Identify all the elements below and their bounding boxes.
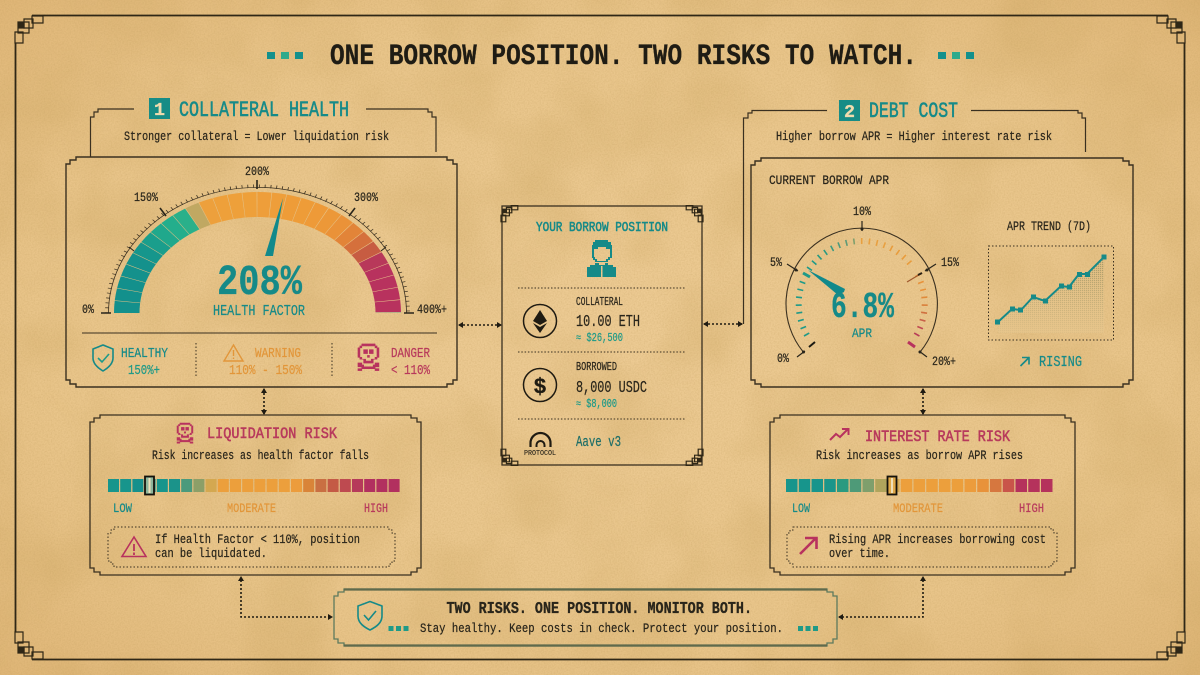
connector arrows xyxy=(238,321,926,620)
liquidation callout: can be liquidated. xyxy=(155,546,267,561)
dial labels: 10% xyxy=(853,205,871,219)
legend: healthy xyxy=(93,345,168,379)
liquidation subtext: Risk increases as health factor falls xyxy=(152,448,369,463)
panel: debt cost gauge and trend xyxy=(751,158,1133,387)
icon: person xyxy=(587,240,616,277)
section heading: debt cost xyxy=(744,99,1086,324)
gauge scale labels: 0% xyxy=(82,303,94,317)
borrowed row: BORROWED xyxy=(576,361,617,374)
borrowed row: $ xyxy=(534,375,546,400)
liquidation heading xyxy=(177,423,337,443)
section heading: debt cost: Higher borrow APR = Higher interest rate risk xyxy=(776,129,1052,144)
dial labels xyxy=(770,205,959,369)
summary headline: TWO RISKS. ONE POSITION. MONITOR BOTH. xyxy=(446,599,752,618)
summary subtext: Stay healthy. Keep costs in check. Protect your position. xyxy=(420,621,783,636)
health factor value xyxy=(213,258,305,320)
apr trend chart xyxy=(988,219,1114,340)
apr dial xyxy=(786,221,937,357)
interest heading: INTEREST RATE RISK xyxy=(865,428,1010,446)
liquidation bar labels: HIGH xyxy=(364,501,388,516)
liquidation bar labels xyxy=(113,501,388,516)
borrowed row: ≈ $8,000 xyxy=(576,398,617,411)
icon: shield check xyxy=(358,602,382,630)
gauge needle xyxy=(265,198,283,256)
section heading: collateral health: 1 xyxy=(154,101,165,121)
interest bar labels: MODERATE xyxy=(893,501,943,516)
apr value xyxy=(831,287,894,341)
gauge scale labels: 400%+ xyxy=(417,303,447,317)
interest bar labels: LOW xyxy=(792,501,810,516)
legend: danger: < 110% xyxy=(391,363,430,379)
collateral row: COLLATERAL xyxy=(576,296,623,309)
legend: healthy: 150%+ xyxy=(128,363,160,379)
protocol row xyxy=(524,433,621,458)
section heading: debt cost: DEBT COST xyxy=(869,99,958,124)
health factor value: HEALTH FACTOR xyxy=(213,303,305,320)
title: ONE BORROW POSITION. TWO RISKS TO WATCH. xyxy=(330,40,917,74)
gauge tick ring xyxy=(107,186,408,313)
section heading: collateral health: Stronger collateral = Lower liquidation risk xyxy=(124,129,389,144)
interest callout xyxy=(787,527,1057,567)
protocol row: Aave v3 xyxy=(576,435,621,451)
legend: warning xyxy=(224,345,302,379)
apr value: APR xyxy=(852,326,872,341)
panel: liquidation risk xyxy=(90,415,421,575)
gauge scale labels: 200% xyxy=(245,165,269,179)
legend: warning: WARNING xyxy=(255,346,301,362)
gauge major ticks xyxy=(101,180,414,313)
protocol row: PROTOCOL xyxy=(524,450,556,458)
rising label xyxy=(1020,354,1082,371)
liquidation bar labels: LOW xyxy=(113,501,132,516)
rising label: RISING xyxy=(1039,354,1082,371)
interest bar labels: HIGH xyxy=(1019,501,1044,516)
collateral row xyxy=(524,296,640,345)
current borrow apr label: CURRENT BORROW APR xyxy=(769,173,889,188)
interest callout: Rising APR increases borrowing cost xyxy=(829,532,1046,547)
panel: your borrow position xyxy=(501,206,703,465)
section heading: debt cost: 2 xyxy=(844,103,855,123)
legend: warning: 110% - 150% xyxy=(229,363,302,379)
section heading: collateral health: COLLATERAL HEALTH xyxy=(179,98,349,123)
liquidation callout xyxy=(108,527,395,567)
collateral row: 10.00 ETH xyxy=(576,313,640,332)
dial labels: 20%+ xyxy=(932,355,956,369)
dial labels: 15% xyxy=(941,256,959,270)
gauge scale labels xyxy=(82,165,447,317)
gauge arc segments xyxy=(186,253,329,313)
health factor value: 208% xyxy=(217,258,302,307)
panel: collateral health gauge xyxy=(66,157,457,387)
liquidation heading: LIQUIDATION RISK xyxy=(207,425,337,443)
gauge scale labels: 150% xyxy=(134,191,158,205)
apr trend chart: APR TREND (7D) xyxy=(1007,219,1091,234)
borrowed row xyxy=(524,361,647,411)
legend: danger: DANGER xyxy=(391,346,430,362)
dial needle xyxy=(808,270,845,295)
collateral row: ≈ $26,500 xyxy=(576,332,623,345)
liquidation bar labels: MODERATE xyxy=(227,501,276,516)
interest heading xyxy=(830,428,1010,446)
borrowed row: 8,000 USDC xyxy=(576,379,647,398)
dial labels: 0% xyxy=(777,352,789,366)
interest bar labels xyxy=(792,501,1044,516)
apr value: 6.8% xyxy=(831,287,894,328)
interest subtext: Risk increases as borrow APR rises xyxy=(816,448,1023,463)
liquidation callout: If Health Factor < 110%, position xyxy=(155,532,360,547)
panel: bottom summary xyxy=(334,589,837,646)
position heading: YOUR BORROW POSITION xyxy=(536,221,668,236)
interest callout: over time. xyxy=(829,546,890,561)
liquidation risk bar xyxy=(108,476,400,494)
section heading: collateral health xyxy=(90,98,436,157)
dial labels: 5% xyxy=(770,256,782,270)
panel: interest rate risk xyxy=(770,415,1075,575)
legend: danger xyxy=(358,344,430,379)
legend: healthy: HEALTHY xyxy=(121,346,168,362)
interest risk bar xyxy=(786,476,1052,494)
gauge scale labels: 300% xyxy=(354,191,378,205)
